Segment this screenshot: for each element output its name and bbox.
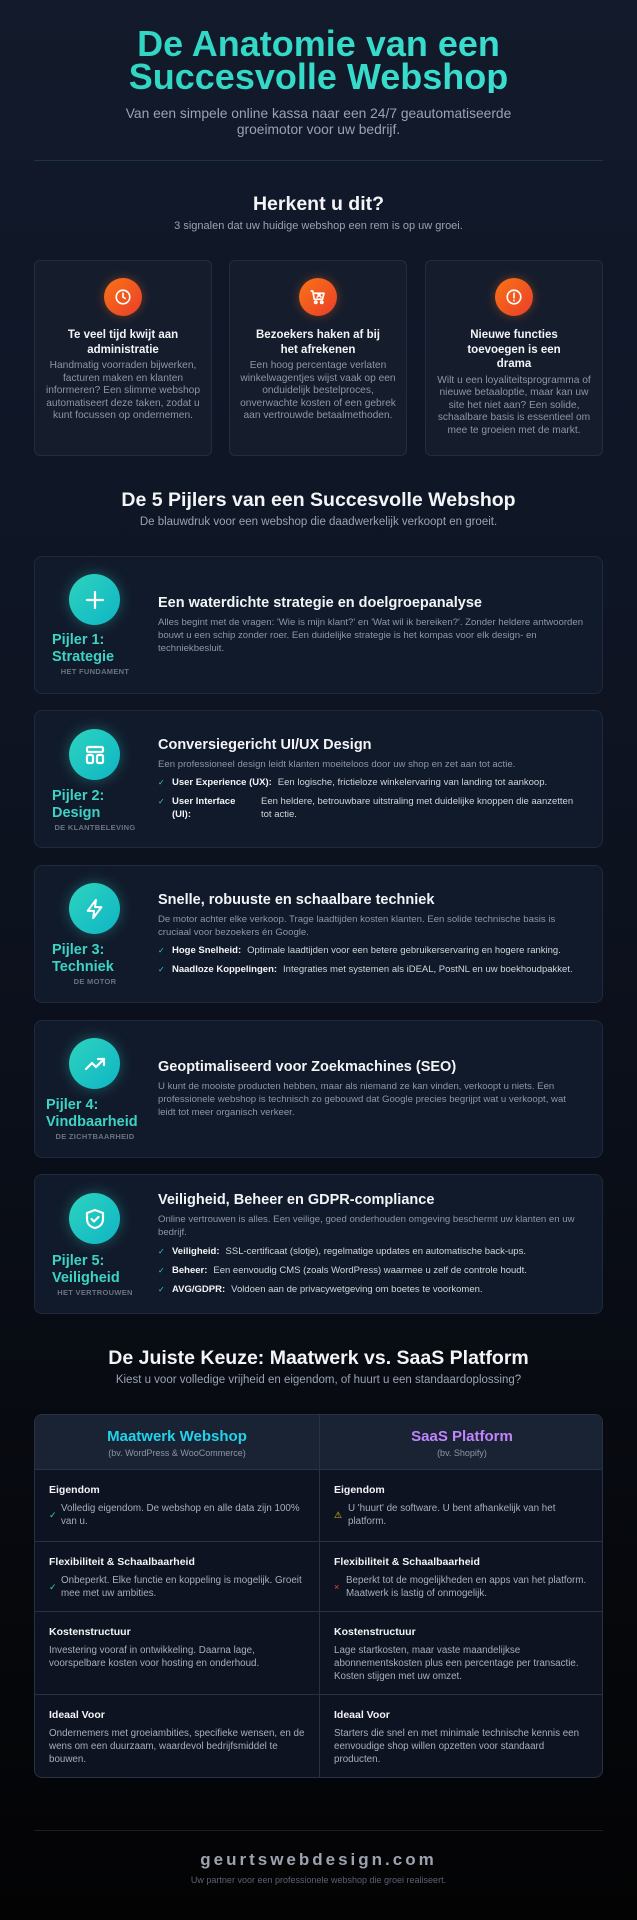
- pijler 5 content: Beheer:: [172, 1264, 207, 1276]
- row: kosten maatwerk: Investering vooraf in ontwikkeling. Daarna lage, voorspelbare kosten voor hosting en onderhoud.: [49, 1645, 259, 1669]
- column header: maatwerk: Maatwerk Webshop: [107, 1428, 247, 1445]
- row: ideaal maatwerk: [49, 1709, 304, 1765]
- pijler 5 label: [52, 1253, 120, 1286]
- pijler 2 label: [52, 788, 104, 821]
- pijler 5 content: Een eenvoudig CMS (zoals WordPress) waarmee u zelf de controle houdt.: [213, 1264, 527, 1276]
- column header: maatwerk: [35, 1415, 319, 1470]
- pijler 2 label: Design: [52, 805, 100, 821]
- problem 2 title: het afrekenen: [281, 344, 355, 356]
- heading: herkent u dit: Herkent u dit?: [253, 193, 384, 215]
- row: kosten maatwerk: [35, 1612, 319, 1695]
- problem 3 title: drama: [497, 358, 531, 370]
- row: flexibiliteit maatwerk: [35, 1542, 319, 1612]
- pijler 1 content: [158, 595, 583, 654]
- pijler 5 content: AVG/GDPR:: [172, 1284, 225, 1294]
- row: eigendom saas: Eigendom: [334, 1484, 385, 1496]
- pijler 5 tag: HET VERTROUWEN: [57, 1288, 133, 1297]
- icon: shield: [69, 1193, 120, 1244]
- pijler 2 content: User Interface (UI):: [172, 796, 235, 820]
- problem 2 title: [256, 329, 380, 356]
- subtitle: Van een simpele online kassa naar een 24/7 geautomatiseerde: [126, 106, 511, 121]
- column header: saas: (bv. Shopify): [437, 1448, 487, 1458]
- row: ideaal maatwerk: Ideaal Voor: [49, 1709, 105, 1721]
- panel: problem 3: [425, 260, 603, 456]
- pijler 3 label: Techniek: [52, 959, 114, 975]
- row: eigendom maatwerk: [35, 1470, 319, 1542]
- icon: plus: [69, 574, 120, 625]
- pijler 1 label: [52, 632, 114, 665]
- icon: cart: [299, 278, 337, 316]
- icon: trending up: [69, 1038, 120, 1089]
- pijler 4 label: Pijler 4:: [46, 1097, 98, 1113]
- row: ideaal saas: Ideaal Voor: [334, 1709, 390, 1721]
- problem 1 title: [68, 329, 178, 356]
- pijler 4 tag: DE ZICHTBAARHEID: [56, 1132, 134, 1141]
- row: ideaal maatwerk: Ondernemers met groeiambities, specifieke wensen, en de wens om een duurzaam, waardevol bedrijfsmiddel te bouwen.: [49, 1728, 304, 1765]
- panel: problem 1: [34, 260, 212, 456]
- pijler 4 content: [158, 1059, 566, 1118]
- row: kosten saas: Lage startkosten, maar vaste maandelijkse abonnementskosten plus een percentage per transactie. Kosten stijgen met uw omzet.: [334, 1645, 579, 1682]
- pijler 5 label: Veiligheid: [52, 1270, 120, 1286]
- pijler 4 content: Geoptimaliseerd voor Zoekmachines (SEO): [158, 1059, 456, 1075]
- row: ideaal saas: [334, 1709, 579, 1765]
- pijler 3 content: De motor achter elke verkoop. Trage laadtijden kosten klanten. Een solide technische basis is cruciaal voor bezoekers én Google.: [158, 914, 555, 938]
- panel: pijler 4: [34, 1020, 603, 1158]
- pijler 2 content: Een professioneel design leidt klanten moeiteloos door uw shop en zet aan tot actie.: [158, 759, 515, 770]
- panel: problem 2: [229, 260, 407, 456]
- problem 2 text: Een hoog percentage verlaten winkelwagentjes wijst vaak op een onduidelijk bestelproces, onverwachte kosten of een gebrek aan vertrouwde betaalmethoden.: [240, 360, 396, 421]
- column header: maatwerk: (bv. WordPress & WooCommerce): [108, 1448, 246, 1458]
- row: eigendom maatwerk: ✓: [49, 1510, 57, 1520]
- pijler 3 content: Hoge Snelheid:: [172, 945, 241, 956]
- subheading: pijlers: De blauwdruk voor een webshop die daadwerkelijk verkoopt en groeit.: [140, 516, 497, 528]
- subheading: keuze: Kiest u voor volledige vrijheid en eigendom, of huurt u een standaardoplossing?: [116, 1374, 521, 1386]
- row: eigendom maatwerk: Volledig eigendom. De webshop en alle data zijn 100% van u.: [61, 1503, 300, 1527]
- panel: pijler 2: [34, 710, 603, 848]
- row: flexibiliteit maatwerk: ✓: [49, 1582, 57, 1592]
- panel: pijler 1: [34, 556, 603, 694]
- title: Succesvolle Webshop: [129, 56, 508, 97]
- footer: domain: geurtswebdesign.com: [200, 1850, 437, 1869]
- pijler 2 content: Conversiegericht UI/UX Design: [158, 737, 372, 753]
- title: De Anatomie van een: [137, 23, 500, 64]
- row: flexibiliteit maatwerk: Onbeperkt. Elke functie en koppeling is mogelijk. Groeit mee met uw ambities.: [61, 1575, 302, 1599]
- row: flexibiliteit saas: Beperkt tot de mogelijkheden en apps van het platform. Maatwerk is lastig of onmogelijk.: [346, 1575, 586, 1599]
- pijler 5 content: Voldoen aan de privacywetgeving om boetes te voorkomen.: [231, 1284, 483, 1294]
- column header: saas: SaaS Platform: [411, 1428, 513, 1445]
- row: ideaal saas: Starters die snel en met minimale technische kennis een eenvoudige shop willen opzetten voor standaard producten.: [334, 1728, 579, 1765]
- pijler 4 label: [46, 1097, 138, 1130]
- problem 1 title: administratie: [87, 344, 159, 356]
- row: kosten saas: Kostenstructuur: [334, 1626, 416, 1638]
- pijler 5 content: ✓: [158, 1284, 165, 1294]
- footer: tagline: Uw partner voor een professionele webshop die groei realiseert.: [191, 1875, 446, 1885]
- heading: 5 pijlers: De 5 Pijlers van een Succesvolle Webshop: [121, 489, 516, 511]
- pijler 2 content: ✓: [158, 797, 165, 806]
- title: [0, 27, 637, 93]
- pijler 4 label: Vindbaarheid: [46, 1114, 138, 1130]
- pijler 3 content: [158, 892, 573, 975]
- row: eigendom saas: [320, 1470, 604, 1542]
- panel: pijler 3: [34, 865, 603, 1003]
- problem 1 title: Te veel tijd kwijt aan: [68, 329, 178, 341]
- pijler 5 label: Pijler 5:: [52, 1253, 104, 1269]
- pijler 3 content: Optimale laadtijden voor een betere gebruikerservaring en hogere ranking.: [247, 945, 561, 956]
- row: flexibiliteit saas: ×: [334, 1582, 339, 1592]
- icon: clock: [104, 278, 142, 316]
- row: kosten maatwerk: Kostenstructuur: [49, 1626, 131, 1638]
- problem 2 title: Bezoekers haken af bij: [256, 329, 380, 341]
- pijler 2 tag: DE KLANTBELEVING: [54, 823, 136, 832]
- problem 3 title: toevoegen is een: [467, 344, 561, 356]
- heading: juiste keuze: De Juiste Keuze: Maatwerk vs. SaaS Platform: [108, 1347, 529, 1369]
- pijler 4 content: U kunt de mooiste producten hebben, maar als niemand ze kan vinden, verkoopt u niets. Een professionele webshop is technisch zo gebouwd dat Google precies begrijpt wat u verkoopt, wat leidt tot meer organisch verkeer.: [158, 1081, 566, 1118]
- pijler 2 label: Pijler 2:: [52, 788, 104, 804]
- comparison table: [34, 1414, 603, 1778]
- row: eigendom saas: U 'huurt' de software. U bent afhankelijk van het platform.: [348, 1503, 555, 1527]
- pijler 1 label: Strategie: [52, 649, 114, 665]
- pijler 5 content: Veiligheid:: [172, 1246, 220, 1256]
- pijler 3 content: Integraties met systemen als iDEAL, PostNL en uw boekhoudpakket.: [283, 964, 573, 975]
- pijler 5 content: [158, 1192, 575, 1294]
- pijler 1 content: Een waterdichte strategie en doelgroepanalyse: [158, 595, 482, 611]
- problem 1 text: Handmatig voorraden bijwerken, facturen maken en klanten informeren? Een slimme webshop automatiseert deze taken, zodat u kunt focussen op ondernemen.: [46, 360, 200, 421]
- pijler 2 content: ✓: [158, 778, 165, 787]
- icon: zap: [69, 883, 120, 934]
- problem 3 title: Nieuwe functies: [470, 329, 558, 341]
- row: flexibiliteit maatwerk: Flexibiliteit & Schaalbaarheid: [49, 1556, 195, 1568]
- problem 3 title: [467, 329, 561, 370]
- row: kosten saas: [320, 1612, 604, 1695]
- pijler 5 content: ✓: [158, 1266, 165, 1274]
- icon: layout: [69, 729, 120, 780]
- pijler 3 content: ✓: [158, 965, 165, 974]
- pijler 3 content: Snelle, robuuste en schaalbare techniek: [158, 892, 434, 908]
- pijler 2 content: [158, 737, 573, 820]
- panel: pijler 5: [34, 1174, 603, 1314]
- pijler 5 content: ✓: [158, 1246, 165, 1256]
- icon: alert: [495, 278, 533, 316]
- pijler 3 label: Pijler 3:: [52, 942, 104, 958]
- pijler 2 content: User Experience (UX):: [172, 777, 272, 788]
- subheading: signalen: 3 signalen dat uw huidige webshop een rem is op uw groei.: [174, 220, 463, 232]
- pijler 1 tag: HET FUNDAMENT: [61, 667, 129, 676]
- pijler 3 content: Naadloze Koppelingen:: [172, 964, 277, 975]
- pijler 1 content: Alles begint met de vragen: 'Wie is mijn klant?' en 'Wat wil ik bereiken?'. Zonder heldere antwoorden bouwt u een schip zonder roer. Een duidelijke strategie is het kompas voor elk design- en techniekbesluit.: [158, 617, 583, 654]
- column header: saas: [320, 1415, 604, 1470]
- pijler 3 label: [52, 942, 114, 975]
- pijler 5 content: Online vertrouwen is alles. Een veilige, goed onderhouden omgeving beschermt uw klanten en uw bedrijf.: [158, 1214, 575, 1238]
- pijler 2 content: Een logische, frictieloze winkelervaring van landing tot aankoop.: [278, 777, 547, 788]
- row: flexibiliteit saas: Flexibiliteit & Schaalbaarheid: [334, 1556, 480, 1568]
- pijler 1 label: Pijler 1:: [52, 632, 104, 648]
- pijler 2 content: Een heldere, betrouwbare uitstraling met duidelijke knoppen die aanzetten tot actie.: [261, 796, 573, 820]
- row: eigendom saas: ⚠: [334, 1510, 342, 1520]
- row: flexibiliteit saas: [320, 1542, 604, 1612]
- subtitle: [126, 106, 511, 137]
- problem 3 text: Wilt u een loyaliteitsprogramma of nieuwe betaaloptie, maar kan uw site het niet aan? Een solide, schaalbare basis is essentieel om mee te groeien met de markt.: [437, 374, 591, 436]
- pijler 3 content: ✓: [158, 946, 165, 955]
- pijler 5 content: Veiligheid, Beheer en GDPR-compliance: [158, 1192, 434, 1208]
- pijler 3 tag: DE MOTOR: [74, 977, 116, 986]
- subtitle: groeimotor voor uw bedrijf.: [237, 122, 400, 137]
- pijler 5 content: SSL-certificaat (slotje), regelmatige updates en automatische back-ups.: [226, 1246, 526, 1256]
- row: eigendom maatwerk: Eigendom: [49, 1484, 100, 1496]
